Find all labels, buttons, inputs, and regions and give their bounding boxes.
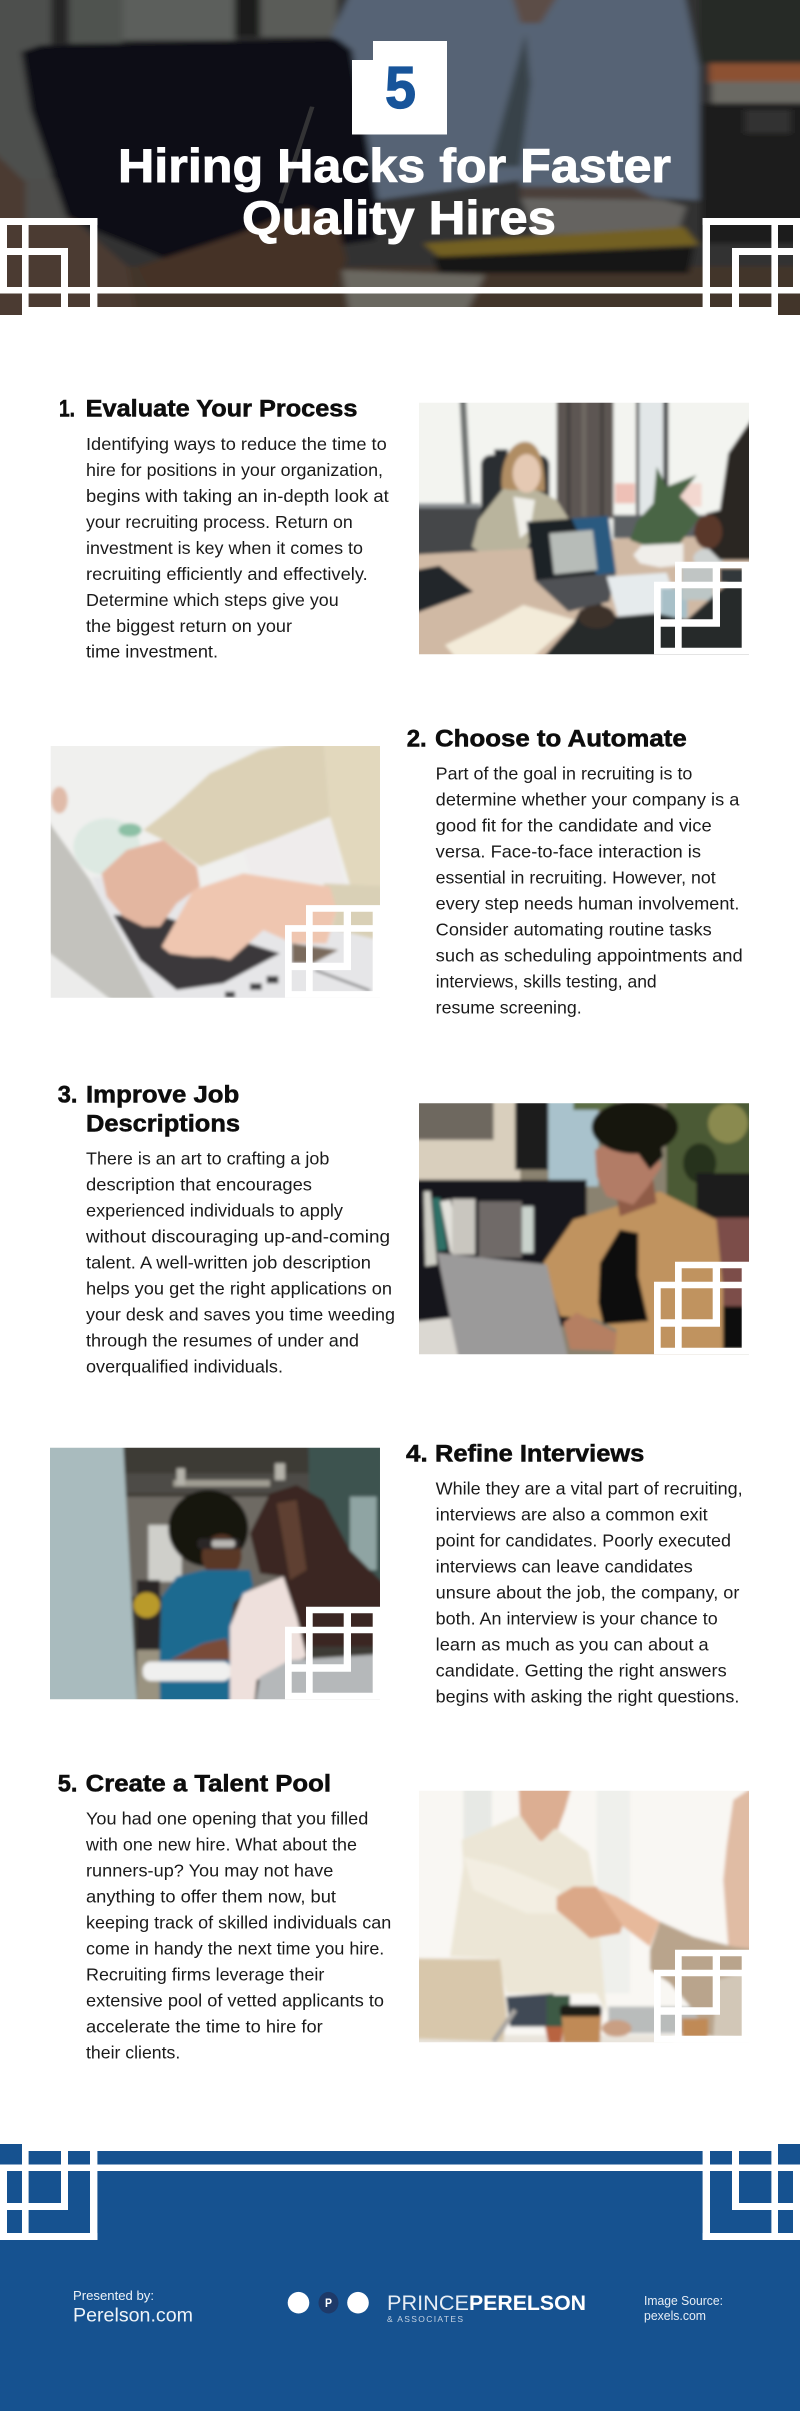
body text: step 2: such as scheduling appointments and	[436, 945, 743, 965]
title: Quality Hires	[242, 191, 556, 244]
body text: step 4: begins with asking the right questions.	[436, 1686, 739, 1706]
body text: step 4: candidate. Getting the right answers	[436, 1660, 727, 1680]
body text: step 5: keeping track of skilled individuals can	[86, 1912, 391, 1932]
body text: step 3	[85, 1148, 395, 1376]
body text: step 4: both. An interview is your chance to	[436, 1608, 718, 1628]
body text: step 5: with one new hire. What about the	[85, 1834, 357, 1854]
body text: step 2: Consider automating routine tasks	[436, 919, 712, 939]
panel: step 5 create a talent pool	[58, 1771, 763, 2062]
body text: step 2: interviews, skills testing, and	[436, 971, 657, 991]
body text: step 5: Recruiting firms leverage their	[86, 1964, 324, 1984]
lattice overlay: step 1 photo	[654, 562, 749, 654]
body text: step 5: You had one opening that you filled	[86, 1808, 368, 1828]
heading: step 3: Improve Job	[86, 1082, 239, 1109]
body text: step 1: recruiting efficiently and effectively.	[86, 564, 368, 584]
presented by	[73, 2288, 193, 2327]
logo: prince perelson and associates: PERELSON	[469, 2292, 586, 2315]
presented by: Perelson.com	[73, 2306, 193, 2327]
panel: step 2 choose to automate	[37, 726, 743, 1017]
body text: step 5: come in handy the next time you hire.	[86, 1938, 384, 1958]
logo: prince perelson and associates: & ASSOCIATES	[387, 2314, 463, 2324]
title	[118, 139, 671, 244]
photo: interview at a table	[419, 402, 749, 654]
lattice overlay: step 4 photo	[285, 1607, 380, 1699]
title: Hiring Hacks for Faster	[118, 139, 671, 192]
body text: step 2	[436, 763, 743, 1017]
body text: step 2: resume screening.	[436, 997, 582, 1017]
body text: step 5: runners-up? You may not have	[86, 1860, 333, 1880]
lattice overlay: step 2 photo	[285, 905, 380, 998]
body text: step 2: versa. Face-to-face interaction is	[436, 841, 701, 861]
body text: step 1: the biggest return on your	[86, 616, 292, 636]
body text: step 4: unsure about the job, the company, or	[436, 1582, 740, 1602]
body text: step 4: interviews can leave candidates	[436, 1556, 693, 1576]
body text: step 4: interviews are also a common exit	[436, 1504, 708, 1524]
heading: step 1: 1.	[59, 396, 75, 423]
heading: step 3: Descriptions	[86, 1111, 240, 1138]
icon: logo dots: P	[325, 2296, 332, 2310]
body text: step 4: learn as much as you can about a	[436, 1634, 709, 1654]
heading: step 5: Create a Talent Pool	[86, 1771, 331, 1798]
body text: step 1: Identifying ways to reduce the time to	[86, 434, 387, 454]
body text: step 3: experienced individuals to apply	[86, 1200, 343, 1220]
image source: pexels.com	[644, 2309, 706, 2323]
number badge	[352, 41, 447, 134]
body text: step 2: essential in recruiting. However, not	[436, 867, 716, 887]
heading: step 5: 5.	[58, 1771, 77, 1798]
photo: handshake over desk	[419, 1790, 749, 2042]
body text: step 4	[436, 1478, 743, 1706]
body text: step 4: While they are a vital part of recruiting,	[436, 1478, 743, 1498]
footer	[0, 2144, 800, 2411]
image source: Image Source:	[644, 2294, 723, 2308]
panel: step 1 evaluate your process	[59, 390, 760, 667]
body text: step 3: without discouraging up-and-coming	[85, 1226, 390, 1246]
photo: hands typing on laptop	[50, 746, 380, 998]
decorative frame: bottom left	[0, 2144, 97, 2240]
body text: step 4: point for candidates. Poorly executed	[436, 1530, 731, 1550]
heading: step 2: Choose to Automate	[435, 726, 687, 753]
body text: step 3: overqualified individuals.	[86, 1356, 283, 1376]
logo: prince perelson and associates	[288, 2292, 586, 2324]
heading: step 3: 3.	[58, 1082, 77, 1109]
body text: step 2: every step needs human involvement.	[436, 893, 739, 913]
body text: step 3: through the resumes of under and	[86, 1330, 359, 1350]
icon: logo dots	[288, 2292, 369, 2314]
panel: step 4 refine interviews	[37, 1433, 743, 1713]
heading: step 3	[58, 1082, 240, 1138]
body text: step 3: talent. A well-written job description	[86, 1252, 371, 1272]
lattice overlay: step 3 photo	[654, 1262, 749, 1354]
heading: step 4: 4.	[406, 1441, 428, 1468]
panel: step 3 improve job descriptions	[58, 1082, 763, 1376]
logo: prince perelson and associates: PRINCE	[387, 2292, 469, 2315]
body text: step 5: their clients.	[86, 2042, 180, 2062]
heading: step 4: Refine Interviews	[435, 1441, 644, 1468]
body text: step 3: There is an art to crafting a job	[86, 1148, 329, 1168]
heading: step 2: 2.	[407, 726, 427, 753]
photo: woman working on laptop	[419, 1103, 749, 1354]
lattice overlay: step 5 photo	[654, 1950, 749, 2042]
header photo: desk and laptop	[0, 0, 800, 315]
decorative frame: top left	[0, 218, 97, 314]
header banner	[0, 0, 800, 327]
body text: step 2: determine whether your company is a	[436, 789, 740, 809]
body text: step 5: extensive pool of vetted applicants to	[86, 1990, 384, 2010]
body text: step 1: investment is key when it comes to	[86, 538, 363, 558]
body text: step 2: Part of the goal in recruiting is to	[436, 763, 692, 783]
body text: step 1	[86, 434, 389, 662]
body text: step 2: good fit for the candidate and vice	[436, 815, 712, 835]
body text: step 1: Determine which steps give you	[86, 590, 339, 610]
body text: step 1: time investment.	[86, 642, 218, 662]
photo: two women talking	[50, 1448, 380, 1700]
body text: step 3: helps you get the right applications on	[86, 1278, 392, 1298]
body text: step 1: begins with taking an in-depth look at	[86, 486, 389, 506]
body text: step 5	[85, 1808, 391, 2062]
number badge: 5	[385, 55, 416, 121]
body text: step 3: your desk and saves you time weeding	[86, 1304, 395, 1324]
body text: step 5: anything to offer them now, but	[86, 1886, 336, 1906]
heading: step 1: Evaluate Your Process	[86, 396, 357, 423]
body text: step 3: description that encourages	[86, 1174, 312, 1194]
body text: step 1: hire for positions in your organization,	[86, 460, 383, 480]
decorative frame: top right	[703, 218, 800, 314]
presented by: Presented by:	[73, 2288, 154, 2303]
body text: step 1: your recruiting process. Return on	[86, 512, 353, 532]
decorative frame: bottom right	[703, 2144, 800, 2240]
body text: step 5: accelerate the time to hire for	[86, 2016, 323, 2036]
image source	[644, 2294, 723, 2323]
